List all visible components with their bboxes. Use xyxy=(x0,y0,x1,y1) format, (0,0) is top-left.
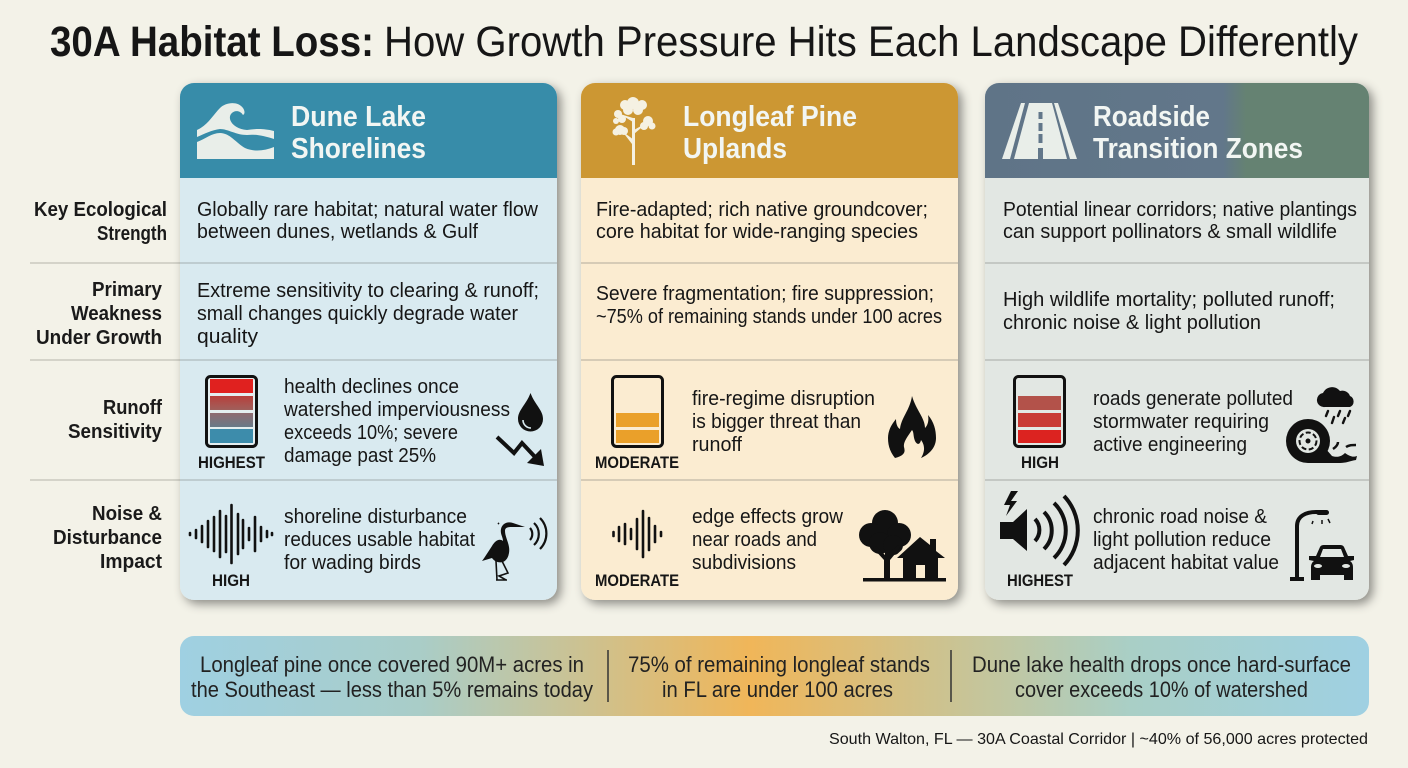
gauge: runoff high: HIGH xyxy=(1021,453,1059,472)
text: primary weakness: quality xyxy=(197,326,258,348)
text: key ecological strength: Globally rare habitat; natural water flow xyxy=(197,199,539,221)
panel: dune lake shorelines xyxy=(180,83,557,600)
gauge: noise moderate waveform xyxy=(595,511,679,590)
heading: longleaf pine uplands: Longleaf Pine xyxy=(683,101,857,133)
text: key ecological strength xyxy=(1003,199,1357,243)
icon: water drop and falling arrow xyxy=(497,393,544,466)
text: primary weakness: Severe fragmentation; fire suppression; xyxy=(596,283,934,305)
row labels: Primary xyxy=(92,279,163,301)
text: primary weakness: High wildlife mortality; polluted runoff; xyxy=(1003,289,1335,311)
stat: longleaf range: Longleaf pine once covered 90M+ acres in xyxy=(200,652,584,677)
gauge: runoff moderate: MODERATE xyxy=(595,453,679,472)
text: noise impact: reduces usable habitat xyxy=(284,529,475,551)
heading: roadside transition zones: Transition Zones xyxy=(1093,133,1303,165)
row labels: Impact xyxy=(100,551,162,573)
text: noise impact xyxy=(692,506,844,574)
text: primary weakness xyxy=(197,280,539,348)
text: noise impact: edge effects grow xyxy=(692,506,844,528)
text: runoff sensitivity: roads generate polluted xyxy=(1093,388,1293,410)
callout banner: key statistics xyxy=(180,636,1369,716)
stat: remaining stands: 75% of remaining longleaf stands xyxy=(628,652,930,677)
icon: road xyxy=(1002,103,1077,159)
text: noise impact: subdivisions xyxy=(692,552,796,574)
text: key ecological strength xyxy=(197,199,539,243)
heading: roadside transition zones: Roadside xyxy=(1093,101,1210,133)
heading: longleaf pine uplands xyxy=(683,101,857,165)
stat: dune lake health xyxy=(972,652,1351,702)
gauge: noise moderate waveform: MODERATE xyxy=(595,571,679,590)
text: runoff sensitivity xyxy=(283,376,510,467)
text: runoff sensitivity: active engineering xyxy=(1093,434,1247,456)
stat: dune lake health: Dune lake health drops once hard-surface xyxy=(972,652,1351,677)
stat: longleaf range xyxy=(191,652,593,702)
icon: rain cloud and tire splash xyxy=(1286,387,1357,463)
gauge: noise high waveform: HIGH xyxy=(212,571,250,590)
text: noise impact: chronic road noise & xyxy=(1093,506,1268,528)
row labels: Key Ecological xyxy=(34,199,167,221)
row labels: Disturbance xyxy=(53,527,162,549)
row labels: Runoff xyxy=(103,397,162,419)
text: key ecological strength xyxy=(596,199,928,243)
text: key ecological strength: Fire-adapted; rich native groundcover; xyxy=(596,199,928,221)
stat: remaining stands xyxy=(628,652,930,702)
text: runoff sensitivity xyxy=(692,388,875,456)
footer note: South Walton, FL — 30A Coastal Corridor | ~40% of 56,000 acres protected xyxy=(829,731,1368,748)
heading: longleaf pine uplands: Uplands xyxy=(683,133,787,165)
row labels: Noise & xyxy=(92,503,162,525)
row labels xyxy=(30,199,180,573)
text: key ecological strength: between dunes, wetlands & Gulf xyxy=(197,221,478,243)
gauge: runoff highest xyxy=(198,376,266,472)
gauge: noise highest speaker: HIGHEST xyxy=(1007,571,1074,590)
text: runoff sensitivity: watershed imperviousness xyxy=(283,399,510,421)
text: runoff sensitivity: damage past 25% xyxy=(284,445,436,467)
row labels: Under Growth xyxy=(36,327,162,349)
panel: roadside transition zones xyxy=(985,83,1369,600)
text: runoff sensitivity: is bigger threat than xyxy=(692,411,861,433)
text: runoff sensitivity: exceeds 10%; severe xyxy=(284,422,458,444)
gauge: runoff moderate xyxy=(595,376,679,472)
text: primary weakness: chronic noise & light pollution xyxy=(1003,312,1261,334)
text: noise impact: for wading birds xyxy=(284,552,421,574)
text: key ecological strength: core habitat for wide-ranging species xyxy=(596,221,918,243)
text: runoff sensitivity: fire-regime disruption xyxy=(692,388,875,410)
panel: longleaf pine uplands xyxy=(581,83,958,600)
icon: tree and house xyxy=(859,510,948,582)
text: noise impact: adjacent habitat value xyxy=(1093,552,1279,574)
text: noise impact xyxy=(284,506,475,574)
text: noise impact: near roads and xyxy=(692,529,817,551)
text: runoff sensitivity xyxy=(1093,388,1293,456)
text: noise impact xyxy=(1093,506,1279,574)
heading: dune lake shorelines xyxy=(291,101,426,165)
text: primary weakness xyxy=(596,283,942,328)
text: primary weakness: Extreme sensitivity to clearing & runoff; xyxy=(197,280,539,302)
gauge: runoff highest: HIGHEST xyxy=(198,453,266,472)
text: noise impact: light pollution reduce xyxy=(1093,529,1271,551)
heading: roadside transition zones xyxy=(1093,101,1303,165)
text: runoff sensitivity: runoff xyxy=(692,434,742,456)
gauge: noise highest speaker xyxy=(1000,491,1078,590)
gauge: runoff high xyxy=(1014,376,1064,472)
stat: longleaf range: the Southeast — less than 5% remains today xyxy=(191,677,593,702)
row labels: Sensitivity xyxy=(68,421,163,443)
title: 30A Habitat Loss: xyxy=(50,18,374,66)
icon: heron with sound waves xyxy=(482,518,546,580)
icon: pine tree xyxy=(612,97,656,165)
title: How Growth Pressure Hits Each Landscape Differently xyxy=(384,18,1358,66)
text: primary weakness xyxy=(1003,289,1335,334)
icon: wave xyxy=(197,103,274,159)
stat: dune lake health: cover exceeds 10% of watershed xyxy=(1015,677,1308,702)
heading: dune lake shorelines: Shorelines xyxy=(291,133,426,165)
stat: remaining stands: in FL are under 100 acres xyxy=(662,677,893,702)
icon: street lamp and car xyxy=(1290,510,1354,581)
heading: dune lake shorelines: Dune Lake xyxy=(291,101,426,133)
text: primary weakness: ~75% of remaining stands under 100 acres xyxy=(596,306,942,328)
icon: flame xyxy=(888,396,936,458)
text: runoff sensitivity: health declines once xyxy=(284,376,459,398)
row labels: Weakness xyxy=(71,303,162,325)
text: runoff sensitivity: stormwater requiring xyxy=(1093,411,1269,433)
text: primary weakness: small changes quickly degrade water xyxy=(197,303,518,325)
text: noise impact: shoreline disturbance xyxy=(284,506,467,528)
text: key ecological strength: Potential linear corridors; native plantings xyxy=(1003,199,1357,221)
text: key ecological strength: can support pollinators & small wildlife xyxy=(1003,221,1337,243)
row labels: Strength xyxy=(97,223,167,245)
gauge: noise high waveform xyxy=(190,505,272,590)
